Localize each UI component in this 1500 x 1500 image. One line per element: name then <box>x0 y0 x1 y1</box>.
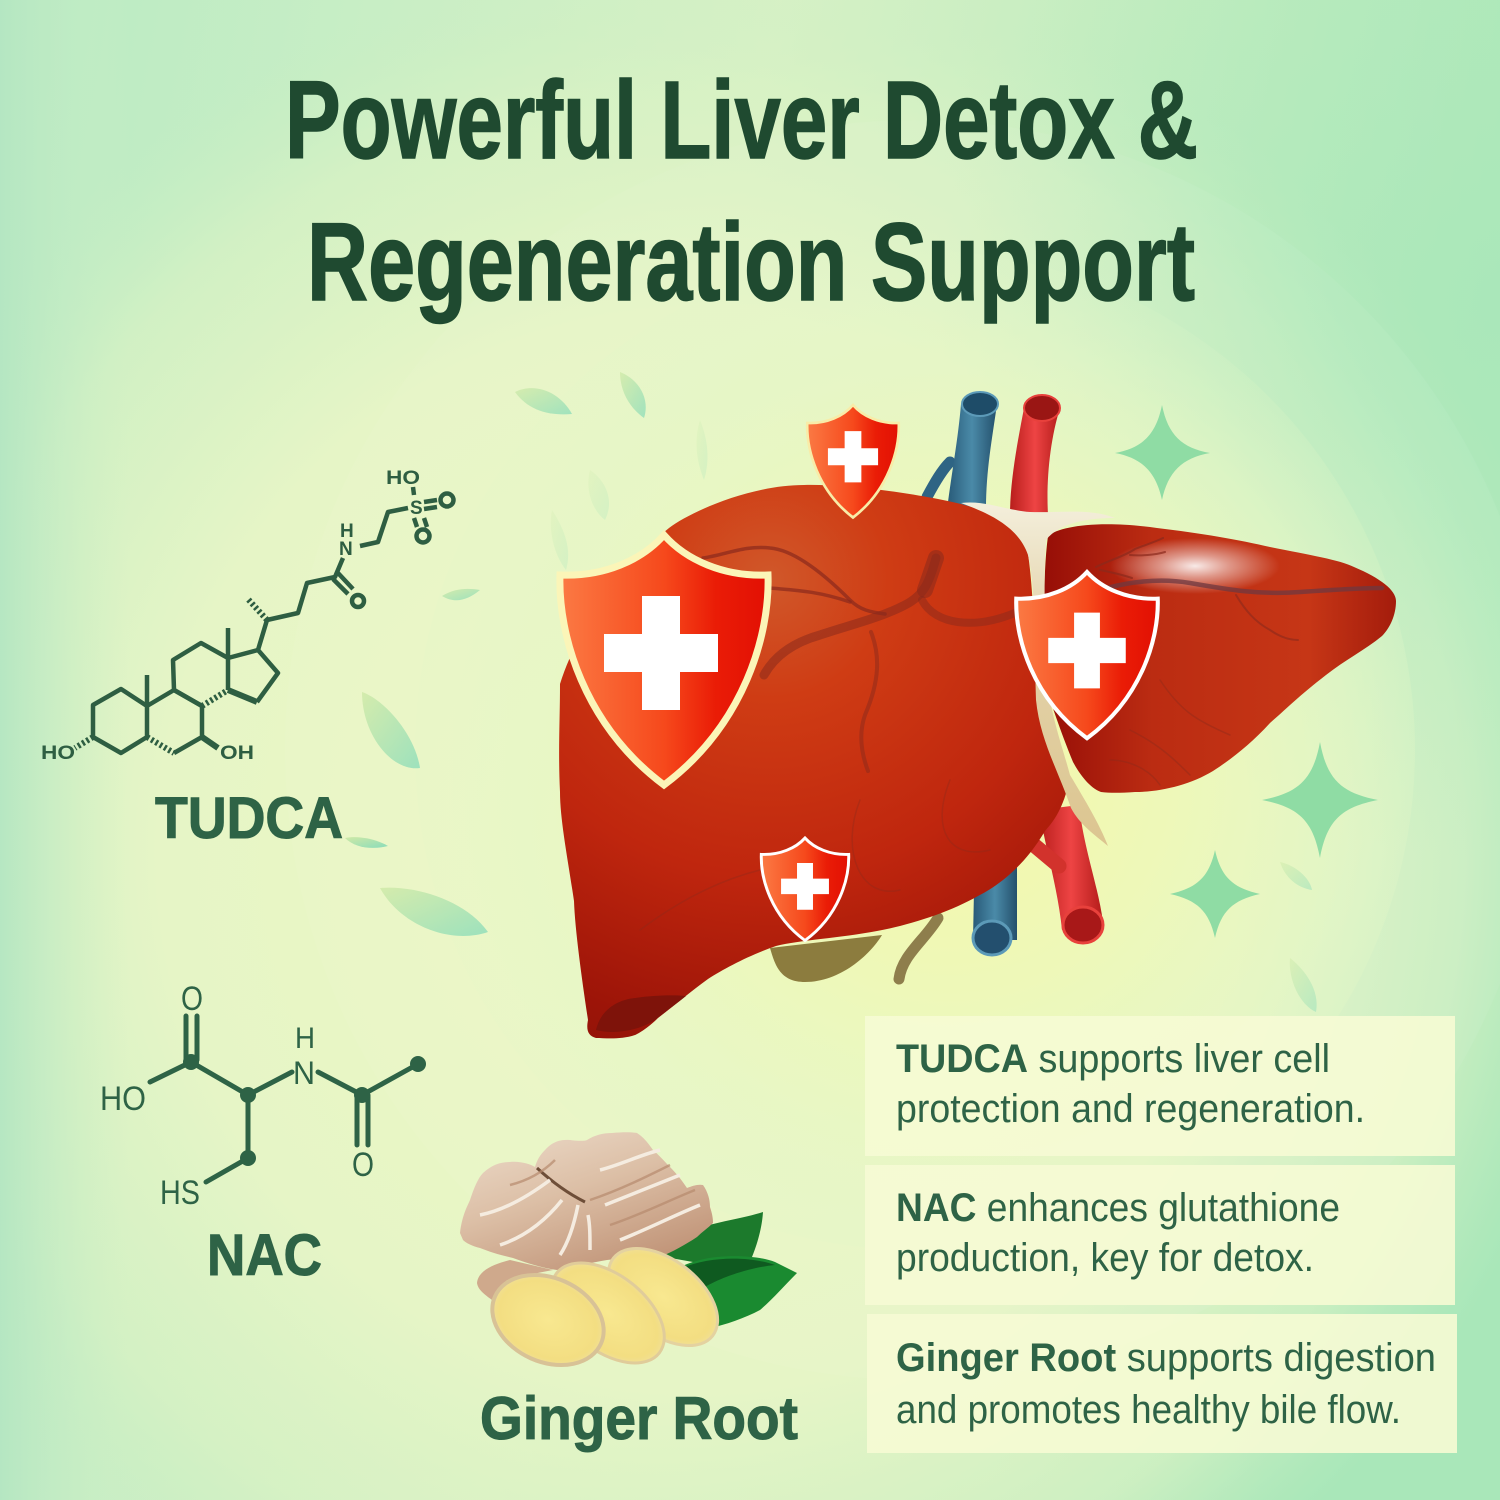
TUDCA atom labels: HO <box>386 468 420 489</box>
TUDCA atom labels: H <box>340 521 354 542</box>
panel: Ginger Root text: and promotes healthy bile flow. <box>896 1388 1401 1432</box>
NAC atoms: HO <box>100 1080 146 1118</box>
Ginger Root label: Ginger Root <box>480 1385 798 1452</box>
NAC atoms: HS <box>160 1174 200 1212</box>
panel: TUDCA text <box>865 1016 1455 1156</box>
panel: Ginger Root text: Ginger Root supports digestion <box>896 1336 1436 1380</box>
icon: shield bottom <box>761 838 849 940</box>
NAC label: NAC <box>207 1223 322 1288</box>
title <box>285 59 1198 324</box>
panel: TUDCA text: TUDCA supports liver cell <box>896 1037 1330 1081</box>
panel: NAC text <box>865 1165 1455 1305</box>
icon: shield large <box>560 535 768 785</box>
panel: NAC text: production, key for detox. <box>896 1236 1314 1280</box>
icon: ginger root <box>460 1132 797 1383</box>
icon: shield top <box>807 405 899 518</box>
TUDCA atom labels: N <box>339 539 353 560</box>
NAC atoms: O <box>352 1146 374 1184</box>
TUDCA atom labels: S <box>410 498 423 519</box>
panel: Ginger Root text <box>867 1314 1457 1453</box>
icon: liver with vessels and shields <box>559 392 1396 1038</box>
TUDCA molecule <box>75 487 454 753</box>
vessels top <box>927 392 1060 515</box>
icon: shield right <box>1016 572 1158 738</box>
ligament <box>961 502 1115 846</box>
title: Powerful Liver Detox & <box>285 59 1198 182</box>
TUDCA label: TUDCA <box>155 786 343 851</box>
panel: NAC text: NAC enhances glutathione <box>896 1186 1340 1230</box>
NAC atoms: N <box>293 1055 315 1091</box>
NAC molecule <box>150 1016 418 1182</box>
TUDCA atom labels <box>41 468 423 764</box>
panel: TUDCA text: protection and regeneration. <box>896 1087 1365 1131</box>
veins <box>640 538 1382 930</box>
title: Regeneration Support <box>307 201 1195 324</box>
right lobe <box>1044 524 1396 793</box>
decorative leaves <box>345 372 1317 1012</box>
NAC atoms <box>100 980 426 1212</box>
left lobe <box>559 485 1067 1038</box>
NAC atoms: O <box>181 980 203 1018</box>
TUDCA atom labels: OH <box>220 743 254 764</box>
vessels bottom <box>770 805 1103 982</box>
NAC atoms: H <box>295 1022 315 1055</box>
TUDCA atom labels: HO <box>41 743 75 764</box>
liver notch <box>596 995 686 1032</box>
icon: sparkles <box>1115 405 1378 938</box>
